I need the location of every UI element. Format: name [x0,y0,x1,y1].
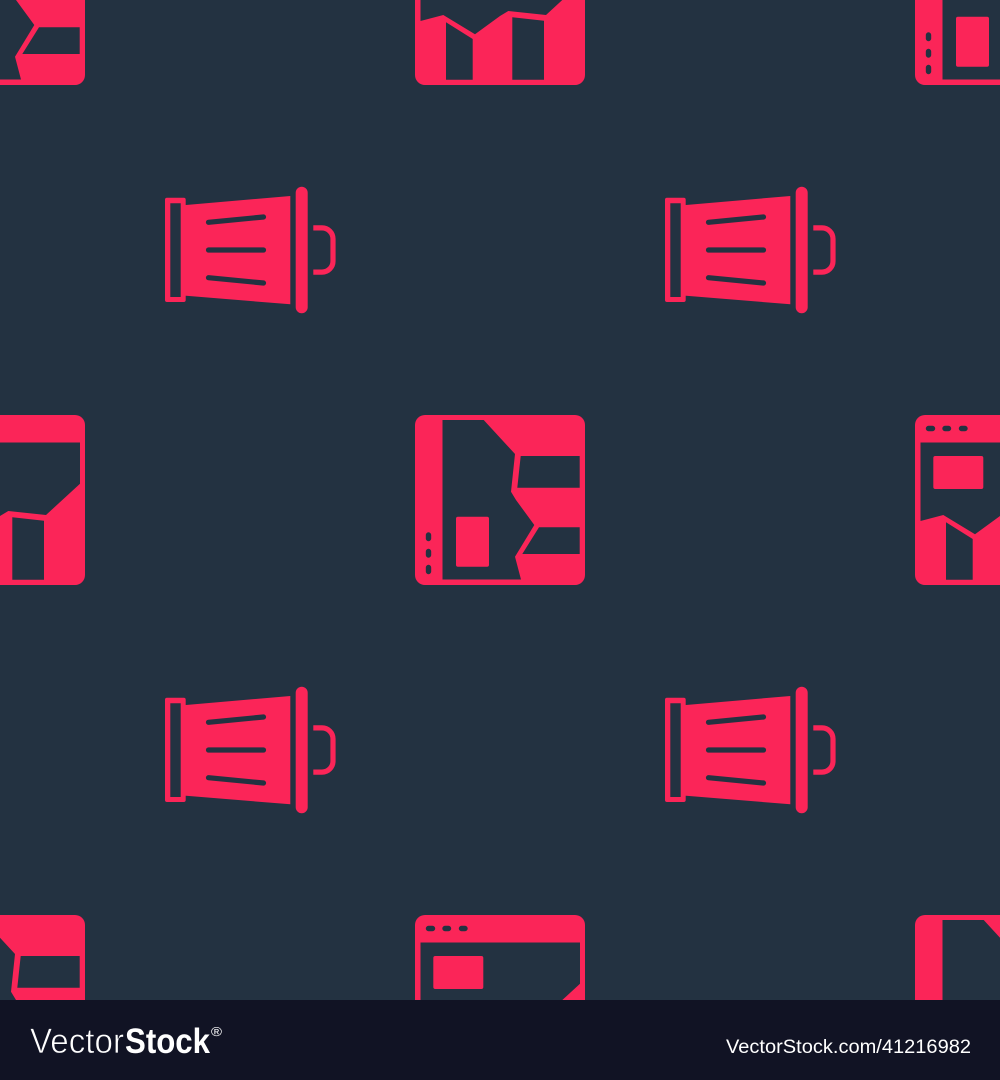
footer logo: ® [211,1024,222,1039]
icon: trash bin lower left [165,687,333,813]
icon: trash bin lower right [665,687,833,813]
icon: trash bin upper right [665,187,833,313]
footer bar [0,1000,1000,1080]
footer image id: VectorStock.com/41216982 [726,1037,971,1058]
icon: rotated window top right [915,0,1000,85]
footer logo: Vector [30,1022,124,1061]
icon: rotated window centre [415,415,585,585]
icon: rotated window top left [0,0,85,85]
icon: window middle right [915,415,1000,585]
footer logo [30,1022,222,1061]
footer logo: Stock [125,1022,210,1061]
icon: window bottom centre [415,915,585,1080]
icon: trash bin upper left [165,187,333,313]
icon: rotated window bottom left [0,915,85,1080]
icon: window middle left [0,415,85,585]
icon: rotated window bottom right [915,915,1000,1080]
icon: window top centre [415,0,585,85]
